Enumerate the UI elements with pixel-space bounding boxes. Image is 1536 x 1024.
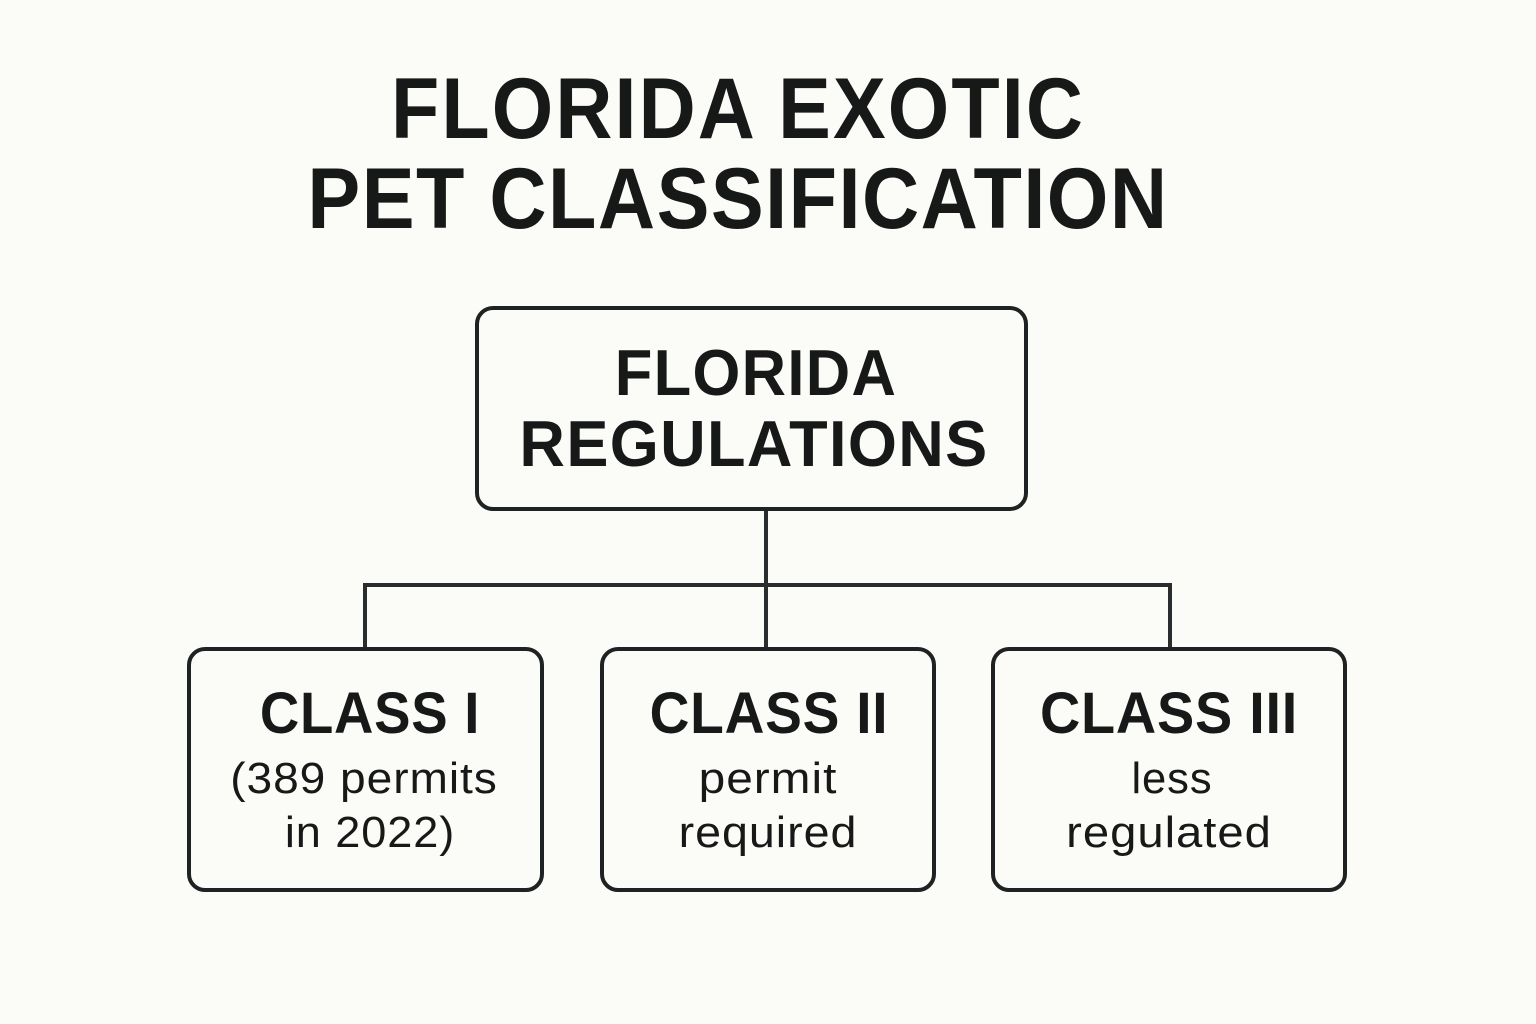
connector lines	[363, 511, 1172, 647]
box: Class III: less	[1131, 754, 1212, 803]
box: Florida Regulations: FLORIDA	[615, 336, 897, 409]
box: Class I: CLASS I	[260, 681, 480, 746]
box: Class III: regulated	[1066, 808, 1272, 857]
title: PET CLASSIFICATION	[307, 151, 1168, 247]
box: Class II: required	[679, 808, 857, 857]
box: Class I: (389 permits	[230, 754, 498, 803]
box: Class II: CLASS II	[650, 681, 888, 746]
box: Florida Regulations	[475, 306, 1028, 511]
box: Class II	[600, 647, 936, 892]
box: Class III	[991, 647, 1347, 892]
box: Class I	[187, 647, 544, 892]
box: Class II: permit	[699, 754, 837, 803]
title	[307, 61, 1168, 247]
box: Class I: in 2022)	[285, 808, 455, 857]
box: Florida Regulations: REGULATIONS	[519, 407, 989, 480]
box: Class III: CLASS III	[1040, 681, 1298, 746]
title: FLORIDA EXOTIC	[391, 61, 1085, 157]
